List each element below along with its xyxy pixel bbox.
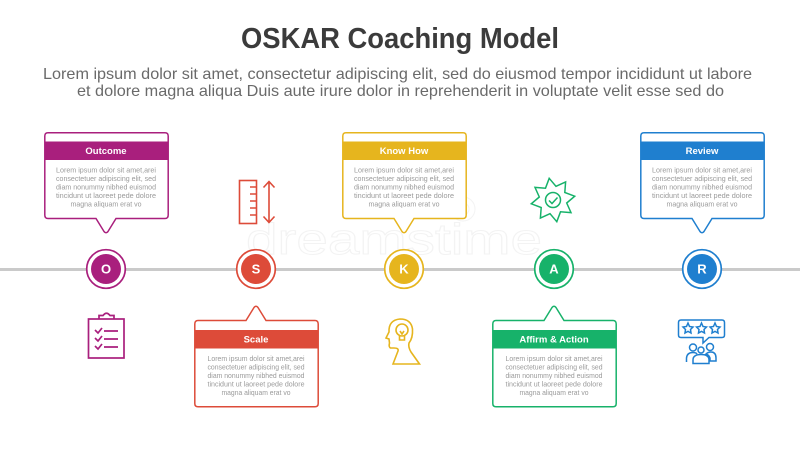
card body text: Know How: magna aliquam erat vo (368, 200, 440, 208)
node: K (385, 250, 423, 288)
card body text: Outcome: consectetuer adipiscing elit, sed (56, 174, 156, 183)
heading: Know How: Know How (380, 146, 429, 157)
card body text: Affirm & Action: consectetuer adipiscing elit, sed (506, 362, 602, 372)
node: R: R (697, 262, 707, 276)
card body text: Know How: tincidunt ut laoreet pede dolore (354, 191, 454, 200)
node: R (683, 250, 721, 288)
node: S: S (252, 262, 261, 276)
card: Scale (194, 306, 318, 407)
subtitle text (43, 66, 752, 100)
card: Outcome (44, 133, 168, 233)
card: Affirm & Action (492, 306, 616, 407)
header band: Review (640, 142, 764, 160)
icon: head with light bulb (386, 319, 420, 364)
header band: Outcome (44, 142, 168, 160)
icon: starburst badge with check (531, 178, 575, 222)
icon: clipboard checklist (88, 313, 124, 358)
card body text: Scale: diam nonummy nibhed euismod (208, 371, 304, 380)
title: OSKAR Coaching Model (241, 23, 559, 55)
node: A (535, 250, 573, 288)
card body text: Review (652, 166, 752, 208)
card body text: Review: Lorem ipsum dolor sit amet,arei (652, 166, 752, 174)
card body text: Outcome: magna aliquam erat vo (70, 200, 142, 208)
card body text: Affirm & Action: Lorem ipsum dolor sit amet,arei (506, 354, 603, 363)
subtitle text: Lorem ipsum dolor sit amet, consectetur adipiscing elit, sed do eiusmod tempor incididunt ut labore (43, 66, 752, 83)
icon: review stars and people (678, 320, 724, 364)
card body text: Outcome: tincidunt ut laoreet pede dolore (56, 191, 156, 200)
card body text: Review: diam nonummy nibhed euismod (652, 182, 752, 192)
header band: Know How (342, 142, 466, 160)
card body text: Affirm & Action (506, 354, 603, 397)
card body text: Outcome: diam nonummy nibhed euismod (56, 182, 156, 192)
card: Know How (342, 133, 466, 233)
card body text: Scale (208, 354, 305, 397)
node: S (237, 250, 275, 288)
heading: Outcome: Outcome (85, 146, 127, 157)
card body text: Outcome (56, 166, 156, 208)
node: A: A (549, 262, 559, 276)
card body text: Know How (354, 166, 454, 208)
card body text: Affirm & Action: diam nonummy nibhed euismod (506, 371, 602, 380)
card body text: Outcome: Lorem ipsum dolor sit amet,arei (56, 166, 156, 174)
card body text: Know How: consectetuer adipiscing elit, sed (354, 174, 454, 183)
node: O (87, 250, 125, 288)
header band: Scale (194, 330, 318, 348)
icon: ruler with arrow (240, 180, 274, 224)
node: O: O (101, 262, 111, 276)
watermark: dreamstime (246, 215, 542, 264)
card body text: Affirm & Action: tincidunt ut laoreet pede dolore (506, 380, 602, 388)
node: K: K (399, 262, 409, 276)
card body text: Review: tincidunt ut laoreet pede dolore (652, 191, 752, 200)
heading: Review: Review (686, 146, 719, 157)
card body text: Scale: consectetuer adipiscing elit, sed (208, 362, 304, 372)
subtitle text: et dolore magna aliqua Duis aute irure dolor in reprehenderit in voluptate velit esse sed do (77, 83, 724, 100)
card body text: Review: magna aliquam erat vo (666, 200, 738, 208)
card body text: Review: consectetuer adipiscing elit, sed (652, 174, 752, 183)
header band: Affirm & Action (492, 330, 616, 348)
card body text: Scale: Lorem ipsum dolor sit amet,arei (208, 354, 305, 363)
card body text: Scale: magna aliquam erat vo (222, 388, 290, 397)
card body text: Know How: diam nonummy nibhed euismod (354, 182, 454, 192)
heading: Affirm & Action: Affirm & Action (519, 334, 589, 346)
timeline line (0, 268, 800, 271)
card body text: Scale: tincidunt ut laoreet pede dolore (208, 380, 304, 388)
heading: Scale: Scale (244, 334, 268, 346)
card: Review (640, 133, 764, 233)
watermark (246, 197, 542, 264)
card body text: Know How: Lorem ipsum dolor sit amet,arei (354, 166, 454, 174)
card body text: Affirm & Action: magna aliquam erat vo (520, 388, 588, 397)
